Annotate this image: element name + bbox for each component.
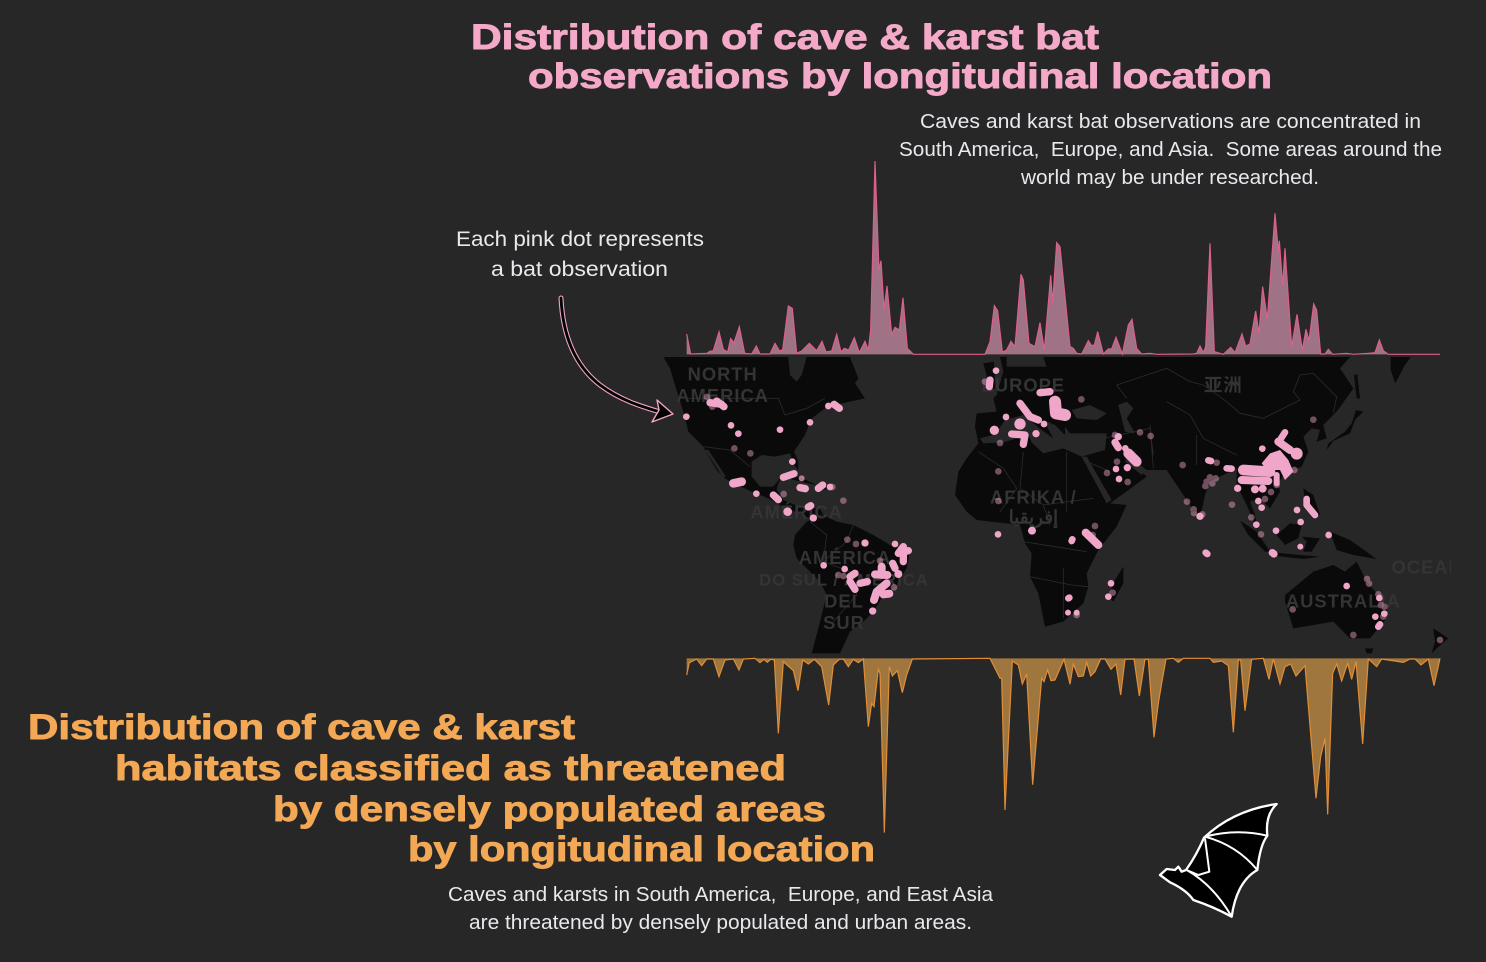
text block: observations description: world may be under researched. xyxy=(1020,167,1319,189)
chart: pink bat observations by longitude xyxy=(687,161,1440,354)
map labels: AUSTRALIA xyxy=(1286,590,1401,611)
text block: observations description xyxy=(899,111,1442,189)
solid observation dots xyxy=(683,367,1388,620)
map labels: DO SUL / AMÉRICA xyxy=(759,570,929,589)
map labels: OCEANIA xyxy=(1392,556,1483,577)
seas cut from land xyxy=(705,357,1147,503)
title: pink: Distribution of cave & karst bat xyxy=(471,18,1099,57)
chart: orange threatened habitats by longitude xyxy=(687,658,1440,833)
map labels: EUROPE xyxy=(982,374,1065,395)
title: orange: by longitudinal location xyxy=(408,830,875,869)
country borders xyxy=(687,368,1337,622)
dense observation clusters xyxy=(710,380,1380,627)
map labels: AMERICA xyxy=(676,385,769,406)
title: orange: habitats classified as threatened xyxy=(115,749,786,788)
text block: threatened description xyxy=(448,884,994,934)
text block: observations description: South America, Europe, and Asia. Some areas around the xyxy=(899,139,1442,161)
arrow: annotation to map xyxy=(561,298,673,422)
map labels: إفريقيا xyxy=(1009,506,1058,528)
map: world map with bat observations xyxy=(663,357,1483,653)
map labels: 亚洲 xyxy=(1204,374,1243,395)
faded observation dots xyxy=(704,378,1443,643)
text block: observations description: Caves and karst bat observations are concentrated in xyxy=(920,111,1421,133)
title: pink xyxy=(471,18,1272,96)
map labels: SUR xyxy=(823,612,865,633)
icon: bat xyxy=(1160,804,1277,917)
map labels: AFRIKA / xyxy=(990,486,1077,507)
title: pink: observations by longitudinal location xyxy=(528,57,1272,96)
map labels: AMÉRICA xyxy=(799,547,891,568)
annotation: pink dot explanation: a bat observation xyxy=(491,258,668,281)
title: orange: by densely populated areas xyxy=(273,790,826,829)
annotation: pink dot explanation: Each pink dot represents xyxy=(456,228,704,251)
text block: threatened description: Caves and karsts in South America, Europe, and East Asia xyxy=(448,884,994,906)
text block: threatened description: are threatened by densely populated and urban areas. xyxy=(469,912,972,934)
title: orange xyxy=(28,708,875,869)
map labels: NORTH xyxy=(688,364,758,385)
annotation: pink dot explanation xyxy=(456,228,704,281)
title: orange: Distribution of cave & karst xyxy=(28,708,575,747)
map labels xyxy=(676,364,1483,633)
map labels: DEL xyxy=(824,590,864,611)
map labels: AMÉRICA xyxy=(750,502,843,523)
land masses xyxy=(663,357,1448,653)
